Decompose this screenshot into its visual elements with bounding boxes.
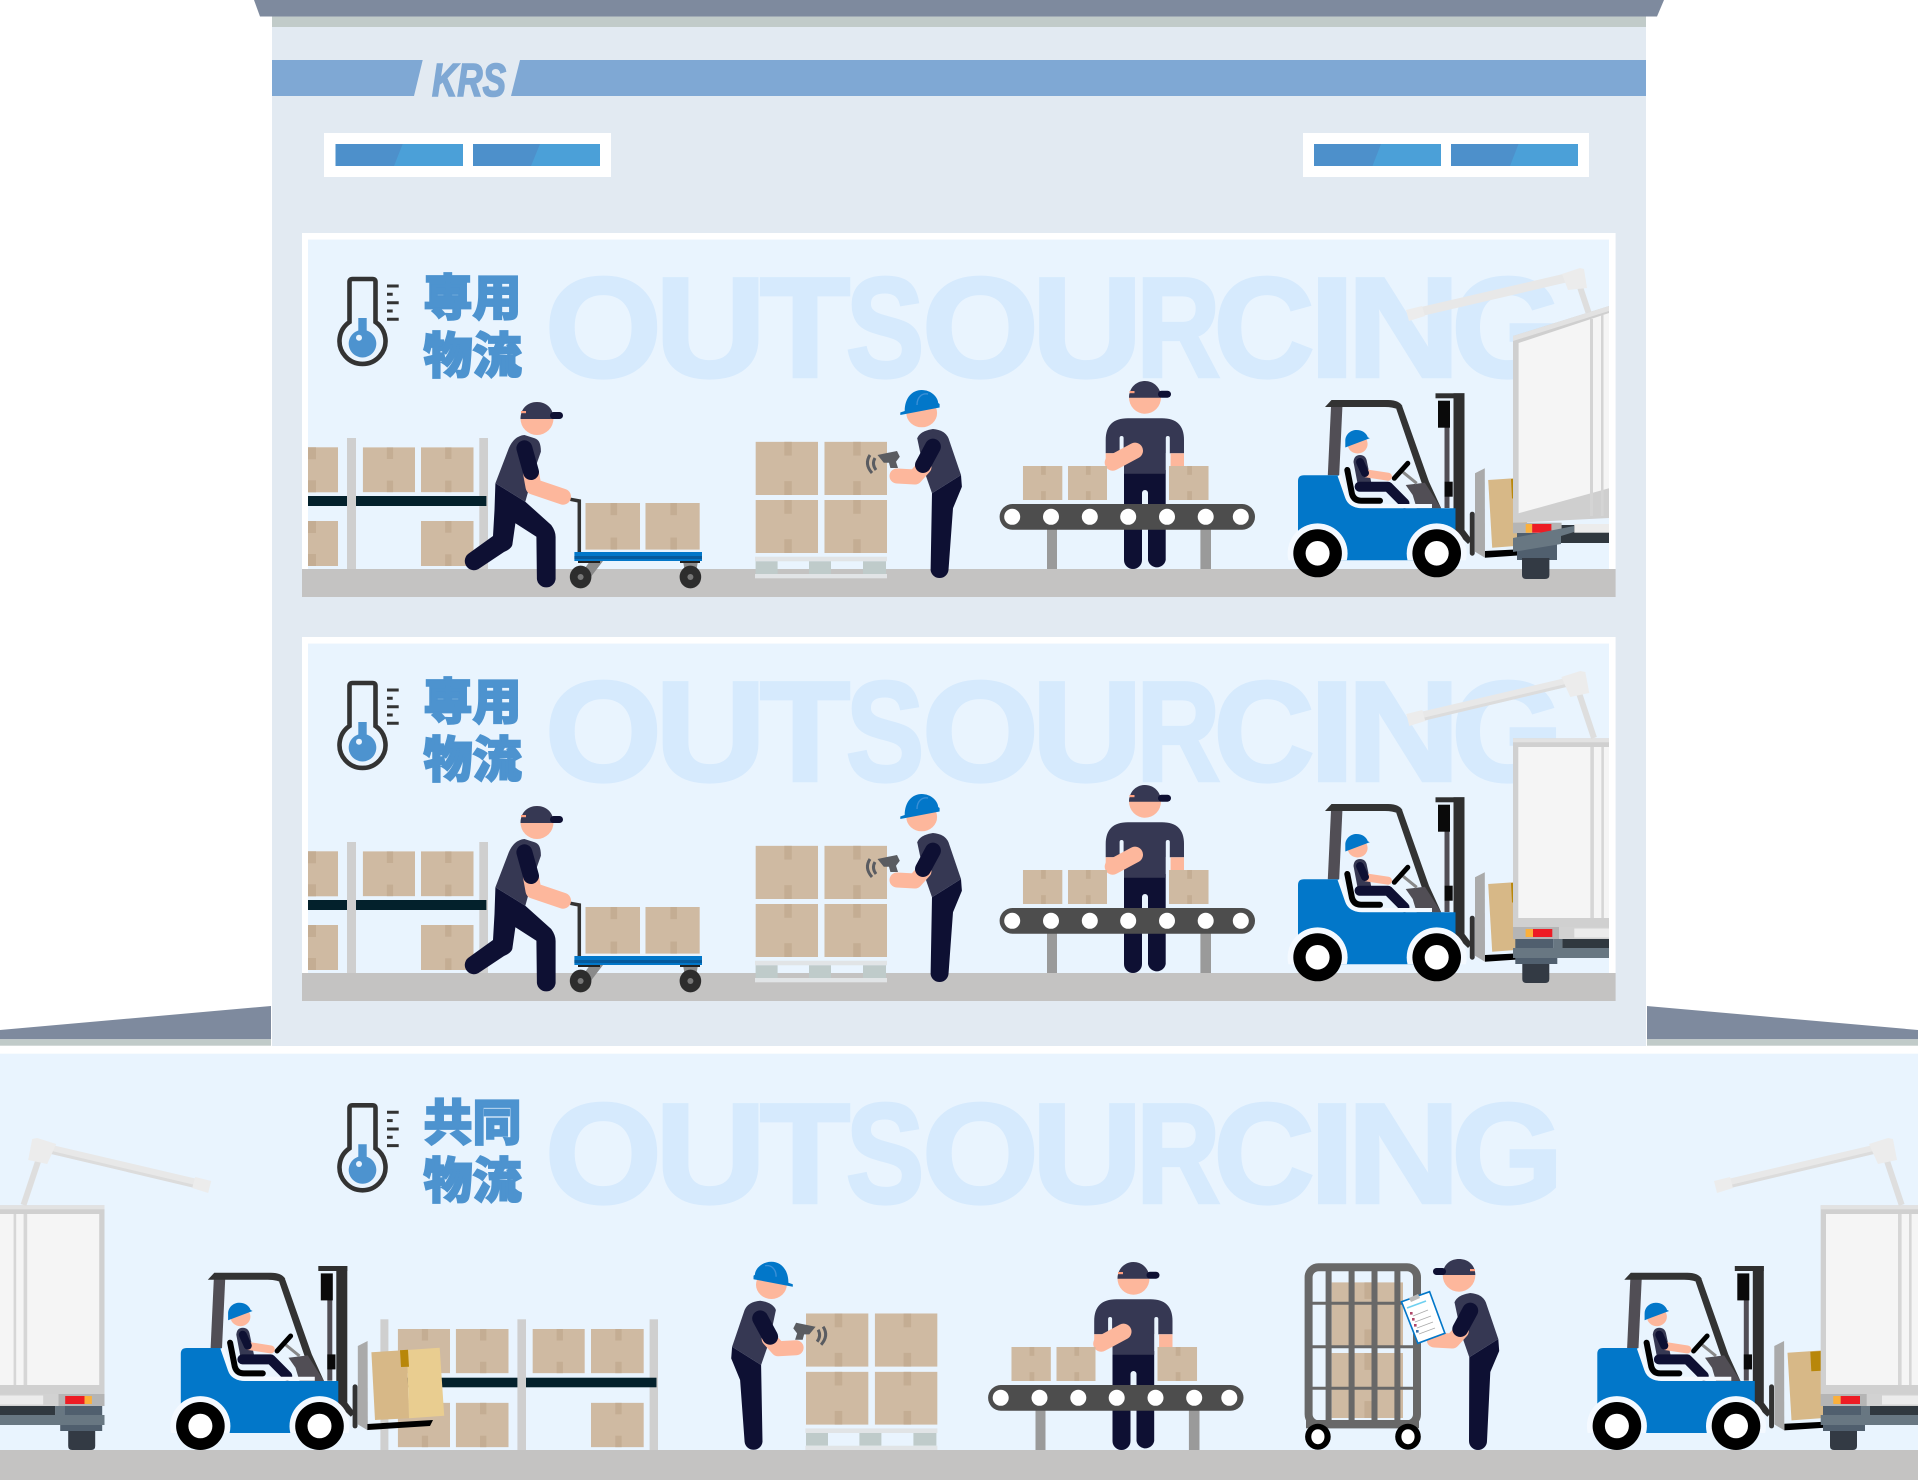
- pallet of boxes: [805, 1313, 937, 1450]
- heading: 共同: [424, 1097, 522, 1151]
- forklift: [1288, 393, 1528, 577]
- watermark OUTSOURCING: O: [545, 248, 662, 408]
- watermark OUTSOURCING: O: [922, 1074, 1039, 1234]
- watermark OUTSOURCING: O: [922, 248, 1039, 408]
- watermark OUTSOURCING: C: [1214, 1074, 1314, 1234]
- left wing roof: [0, 1006, 271, 1046]
- forklift carrying box: [170, 1266, 444, 1450]
- watermark OUTSOURCING: O: [545, 652, 662, 812]
- right wing roof: [1647, 1006, 1918, 1046]
- watermark OUTSOURCING: U: [1032, 652, 1142, 812]
- watermark OUTSOURCING: G: [1452, 652, 1563, 812]
- conveyor and worker: [1000, 785, 1255, 973]
- worker with scanner: [867, 390, 962, 578]
- watermark OUTSOURCING: S: [846, 652, 924, 812]
- watermark OUTSOURCING: T: [760, 652, 850, 812]
- worker pushing cart: [465, 806, 702, 992]
- watermark OUTSOURCING: I: [1309, 1074, 1355, 1234]
- watermark OUTSOURCING: S: [846, 248, 924, 408]
- watermark OUTSOURCING: G: [1452, 248, 1563, 408]
- left windows: [324, 133, 611, 177]
- KRS sign band: [272, 54, 1646, 106]
- watermark OUTSOURCING: T: [760, 1074, 850, 1234]
- roof fascia: [272, 16, 1646, 27]
- right windows: [1303, 133, 1589, 177]
- clipboard: [1402, 1292, 1445, 1343]
- building wall: [272, 27, 1646, 1046]
- watermark OUTSOURCING: O: [545, 1074, 662, 1234]
- watermark OUTSOURCING: O: [922, 652, 1039, 812]
- roll cage trolley with boxes: [1305, 1267, 1421, 1450]
- watermark OUTSOURCING: N: [1347, 1074, 1460, 1234]
- storage shelf with boxes: [380, 1319, 658, 1450]
- icon: thermometer: [340, 683, 399, 768]
- watermark OUTSOURCING: U: [655, 248, 766, 408]
- worker with scanner: [731, 1262, 826, 1450]
- heading: 物流: [424, 734, 522, 788]
- watermark OUTSOURCING: N: [1347, 652, 1460, 812]
- panel: middle floor dedicated logistics: [302, 637, 1623, 1001]
- watermark OUTSOURCING: R: [1136, 652, 1220, 812]
- watermark OUTSOURCING: U: [1032, 248, 1142, 408]
- watermark OUTSOURCING: N: [1347, 248, 1460, 408]
- worker pushing cart: [465, 402, 702, 588]
- watermark OUTSOURCING: S: [846, 1074, 924, 1234]
- icon: thermometer: [340, 279, 399, 364]
- watermark OUTSOURCING: T: [760, 248, 850, 408]
- watermark OUTSOURCING: U: [655, 1074, 766, 1234]
- building roof: [254, 0, 1664, 16]
- storage shelf with boxes: [308, 438, 488, 569]
- panel: ground floor shared logistics: [0, 1054, 1918, 1480]
- watermark OUTSOURCING: I: [1309, 248, 1355, 408]
- heading: 専用: [424, 272, 522, 326]
- storage shelf with boxes: [308, 842, 488, 973]
- worker with scanner: [867, 794, 962, 982]
- watermark OUTSOURCING: C: [1214, 248, 1314, 408]
- watermark OUTSOURCING: U: [1032, 1074, 1142, 1234]
- truck with closed door: [1406, 671, 1623, 983]
- left truck: [0, 1138, 211, 1450]
- heading: 専用: [424, 676, 522, 730]
- conveyor and worker: [988, 1262, 1244, 1450]
- heading: 物流: [424, 330, 522, 384]
- watermark OUTSOURCING: C: [1214, 652, 1314, 812]
- right forklift: [1587, 1266, 1827, 1450]
- logo: KRS: KRS: [432, 54, 506, 106]
- worker with clipboard: [1402, 1259, 1499, 1450]
- pallet of boxes: [755, 442, 887, 578]
- watermark OUTSOURCING: R: [1136, 248, 1220, 408]
- right truck: [1714, 1138, 1918, 1450]
- watermark OUTSOURCING: U: [655, 652, 766, 812]
- truck with wing door open: [1406, 268, 1609, 579]
- pallet of boxes: [755, 846, 887, 982]
- forklift: [1288, 797, 1528, 981]
- heading: 物流: [424, 1155, 522, 1209]
- watermark OUTSOURCING: R: [1136, 1074, 1220, 1234]
- watermark OUTSOURCING: I: [1309, 652, 1355, 812]
- watermark OUTSOURCING: G: [1452, 1074, 1563, 1234]
- conveyor and worker: [1000, 381, 1255, 569]
- panel: upper floor dedicated logistics: [302, 233, 1616, 597]
- icon: thermometer: [340, 1105, 399, 1190]
